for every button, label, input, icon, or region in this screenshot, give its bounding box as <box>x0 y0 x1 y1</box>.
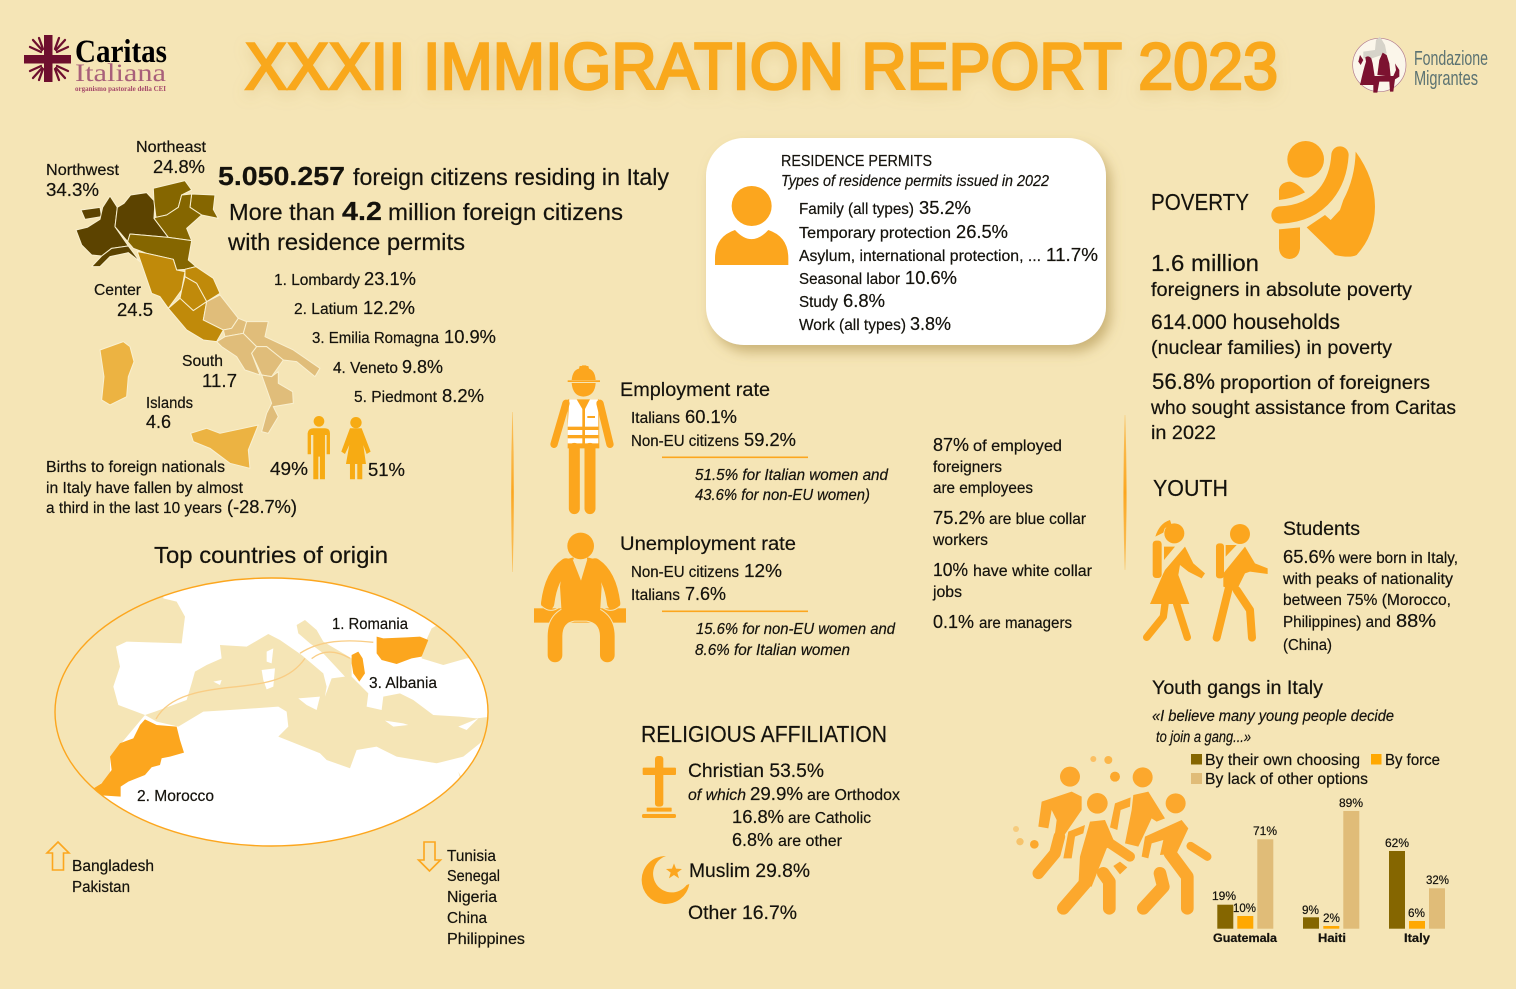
country labels: 1. Romania <box>332 616 408 633</box>
ranking of regions: 9.8% <box>402 357 443 377</box>
heading: YOUTH <box>1153 475 1228 501</box>
icon: pilgrims on donkey <box>1353 37 1406 93</box>
text block: employee statistics: are managers <box>979 615 1072 632</box>
unemployment figures: Italians <box>631 587 680 604</box>
students text: 65.6% <box>1283 547 1335 567</box>
panel: poverty <box>1150 141 1456 444</box>
poverty figures: who sought assistance from Caritas <box>1150 398 1456 419</box>
icon: cross <box>642 756 676 818</box>
text block: employee statistics: workers <box>932 532 988 549</box>
label: Center: Center <box>94 282 141 299</box>
country: Albania <box>352 652 365 682</box>
map of the Mediterranean <box>54 577 489 847</box>
poverty figures: proportion of foreigners <box>1220 373 1430 394</box>
students text: with peaks of nationality <box>1282 571 1453 588</box>
legend: By force <box>1385 752 1440 769</box>
logo: Caritas Italiana: Italiana <box>75 60 166 87</box>
students text: (China) <box>1283 637 1332 654</box>
Christian figures: are Catholic <box>788 810 871 827</box>
label: South: 11.7 <box>202 371 237 391</box>
text block: employee statistics: 10% <box>933 560 968 580</box>
text: births: Births to foreign nationals <box>46 459 225 476</box>
list of permit types: 3.8% <box>910 314 951 334</box>
poverty figures: (nuclear families) in poverty <box>1151 338 1393 359</box>
poverty figures: in 2022 <box>1151 423 1216 444</box>
headline: residence permits: million foreign citizens <box>388 199 623 225</box>
ranking of regions: 23.1% <box>364 269 416 289</box>
students text: 88% <box>1396 611 1436 631</box>
text block: employee statistics: are employees <box>933 480 1033 497</box>
list of permit types: Seasonal labor <box>799 271 900 288</box>
poverty figures: 1.6 million <box>1151 250 1259 276</box>
headline: foreign citizens residing: 5.050.257 <box>218 161 345 191</box>
text block: employee statistics: 75.2% <box>933 508 985 528</box>
group: Italy: Italy <box>1404 933 1431 945</box>
heading: Employment rate <box>620 380 770 401</box>
label: Islands: 4.6 <box>146 412 171 432</box>
headline: residence permits: with residence permits <box>227 229 465 255</box>
note: women employment: 51.5% for Italian women and <box>695 467 889 484</box>
Christian figures: 6.8% <box>732 830 773 850</box>
unemployment figures <box>631 561 782 604</box>
group: Italy: 32% <box>1426 875 1449 887</box>
ranking of regions: 12.2% <box>363 298 415 318</box>
employment figures: Non-EU citizens <box>631 433 739 450</box>
icon: man and woman <box>308 416 371 479</box>
logo: Caritas Italiana: organismo pastorale della CEI <box>75 85 166 93</box>
icon: person <box>715 186 788 265</box>
panel: youth <box>1147 475 1458 654</box>
region: Northeast <box>128 181 218 270</box>
logo: Fondazione Migrantes: Fondazione <box>1414 48 1488 70</box>
text block: employee statistics: foreigners <box>933 459 1002 476</box>
rising countries: Pakistan <box>72 879 130 896</box>
panel: top countries of origin <box>30 542 525 948</box>
employment figures: 59.2% <box>744 430 796 450</box>
falling countries: Senegal <box>447 868 500 885</box>
region: South <box>203 295 320 433</box>
legend: By their own choosing <box>1205 752 1360 769</box>
note: women employment: 43.6% for non-EU women) <box>695 487 870 504</box>
icon: students <box>1147 520 1268 638</box>
unemployment figures: Non-EU citizens <box>631 564 739 581</box>
unemployment figures: 12% <box>744 561 782 581</box>
text block: employee statistics <box>932 435 1092 632</box>
country labels: 2. Morocco <box>137 788 214 805</box>
title: XXXII IMMIGRATION REPORT 2023 <box>245 29 1278 103</box>
label: Northwest: 34.3% <box>46 180 99 200</box>
text: births: (-28.7%) <box>227 497 297 517</box>
list of permit types: Work (all types) <box>799 317 906 334</box>
falling countries: China <box>447 910 487 927</box>
headline: residence permits <box>227 196 623 255</box>
Christian figures <box>688 761 900 850</box>
list of permit types: 11.7% <box>1046 245 1098 265</box>
falling countries <box>447 848 525 948</box>
falling countries: Tunisia <box>447 848 496 865</box>
label: Northeast: 24.8% <box>153 157 205 177</box>
region: Center <box>137 252 223 342</box>
group: Guatemala <box>1212 826 1278 945</box>
region: Islands <box>100 342 258 468</box>
divider left <box>512 412 514 572</box>
headline: residence permits: More than <box>229 199 335 225</box>
ranking of regions: 1. Lombardy <box>274 272 360 289</box>
poverty figures: 614.000 households <box>1151 311 1340 334</box>
list of permit types: 10.6% <box>905 268 957 288</box>
panel: employment <box>554 365 889 509</box>
group: Italy <box>1385 838 1449 945</box>
heading: Types of residence permits issued in 2022 <box>781 173 1049 190</box>
icon: seated man <box>534 533 626 655</box>
Christian figures: are other <box>778 833 842 850</box>
note: women unemployment: 15.6% for non-EU women and <box>696 621 896 638</box>
list of permit types: 26.5% <box>956 222 1008 242</box>
label: Northwest: Northwest <box>46 162 120 179</box>
note: women unemployment <box>695 621 896 659</box>
icon: worker <box>554 365 610 509</box>
employment figures: 60.1% <box>685 407 737 427</box>
text: births: in Italy have fallen by almost <box>46 480 244 497</box>
Muslim figure: Muslim 29.8% <box>689 861 810 882</box>
list of permit types: Temporary protection <box>799 225 951 242</box>
poverty figures <box>1150 250 1456 444</box>
Other figure: Other 16.7% <box>688 903 797 924</box>
stat: gender split: 51% <box>368 460 405 480</box>
list of permit types: Family (all types) <box>799 201 914 218</box>
icon: crescent and star <box>642 856 689 904</box>
country: Romania <box>377 637 428 664</box>
text block: employee statistics: have white collar <box>973 563 1092 580</box>
poverty figures: foreigners in absolute poverty <box>1151 280 1413 301</box>
text: births: a third in the last 10 years <box>46 500 222 517</box>
label: Center <box>94 282 153 320</box>
group: Guatemala: 10% <box>1233 903 1256 915</box>
stat: gender split <box>270 459 405 480</box>
logo: Caritas Italiana <box>24 34 167 93</box>
text block: employee statistics: 87% <box>933 435 969 455</box>
heading: Top countries of origin <box>154 542 388 568</box>
group: Guatemala: Guatemala <box>1213 933 1278 945</box>
logo: Fondazione Migrantes: Migrantes <box>1414 68 1478 90</box>
map of Italy by macro-region <box>76 181 320 468</box>
icon: crouching person <box>1279 141 1375 259</box>
rising countries <box>72 858 154 896</box>
ranking of regions: 10.9% <box>444 327 496 347</box>
label: South: South <box>182 353 223 370</box>
headline: foreign citizens residing: foreign citizens residing in Italy <box>353 164 669 190</box>
icon: running group <box>1013 756 1207 908</box>
label: Center: 24.5 <box>117 300 153 320</box>
list of permit types <box>799 198 1098 334</box>
icon: up arrow <box>47 842 69 870</box>
students text: Students <box>1283 519 1360 540</box>
group: Haiti: 89% <box>1339 798 1363 810</box>
text block: employee statistics: 0.1% <box>933 612 974 632</box>
ranking of regions: 2. Latium <box>294 301 358 318</box>
logo: Caritas Italiana: Caritas <box>75 34 167 70</box>
Christian figures: Christian 53.5% <box>688 761 824 782</box>
quote <box>1152 708 1394 746</box>
group: Italy: 62% <box>1385 838 1409 850</box>
text block: employee statistics: of employed <box>973 438 1062 455</box>
label: Northeast: Northeast <box>136 139 207 156</box>
group: Haiti: 9% <box>1302 905 1319 917</box>
Christian figures: 29.9% <box>750 784 803 804</box>
list of permit types: Study <box>799 294 838 311</box>
students text <box>1282 519 1458 654</box>
rising countries: Bangladesh <box>72 858 154 875</box>
bar chart <box>1212 798 1449 945</box>
country labels <box>137 616 437 805</box>
legend <box>1191 752 1440 788</box>
label: Northeast <box>136 139 207 177</box>
list of permit types: 35.2% <box>919 198 971 218</box>
Christian figures: of which <box>688 787 746 804</box>
icon: Caritas cross <box>24 35 71 82</box>
Christian figures: 16.8% <box>732 807 784 827</box>
quote: to join a gang...» <box>1156 729 1251 746</box>
heading: RELIGIOUS AFFILIATION <box>641 721 887 747</box>
heading <box>781 153 1049 190</box>
Christian figures: are Orthodox <box>807 787 900 804</box>
flow arrows <box>156 641 373 719</box>
heading: Unemployment rate <box>620 534 796 555</box>
employment figures: Italians <box>631 410 680 427</box>
panel: religious affiliation <box>641 721 900 924</box>
label: Islands: Islands <box>146 395 193 412</box>
country labels: 3. Albania <box>369 675 437 692</box>
falling countries: Philippines <box>447 931 525 948</box>
panel: youth gangs <box>1013 678 1449 945</box>
list of permit types: 6.8% <box>843 291 885 311</box>
label: South <box>182 353 237 391</box>
note: women unemployment: 8.6% for Italian women <box>695 642 850 659</box>
headline: residence permits: 4.2 <box>342 196 382 226</box>
group: Haiti: Haiti <box>1318 933 1346 945</box>
ranking of regions <box>274 269 496 406</box>
ranking of regions: 5. Piedmont <box>354 389 438 406</box>
label: Northwest <box>46 162 120 200</box>
text block: employee statistics: jobs <box>932 584 962 601</box>
employment figures <box>631 407 796 450</box>
group: Guatemala: 19% <box>1212 891 1236 903</box>
group: Haiti <box>1302 798 1363 945</box>
quote: «I believe many young people decide <box>1152 708 1394 725</box>
country: Morocco <box>84 719 184 797</box>
headline: foreign citizens residing <box>218 161 669 191</box>
text: births <box>46 459 297 517</box>
group: Guatemala: 71% <box>1253 826 1277 838</box>
ranking of regions: 8.2% <box>442 386 484 406</box>
heading: RESIDENCE PERMITS <box>781 153 932 170</box>
heading: POVERTY <box>1151 189 1249 215</box>
icon: down arrow <box>418 842 440 871</box>
text block: employee statistics: are blue collar <box>989 511 1086 528</box>
panel: residence permits <box>706 138 1106 345</box>
logo: Fondazione Migrantes <box>1353 37 1488 93</box>
falling countries: Nigeria <box>447 889 497 906</box>
poverty figures: 56.8% <box>1152 369 1215 394</box>
divider right <box>1124 415 1126 570</box>
heading: Youth gangs in Italy <box>1152 678 1324 699</box>
list of permit types: Asylum, international protection, ... <box>799 248 1041 265</box>
region: Northwest <box>76 193 168 267</box>
stat: gender split: 49% <box>270 459 308 479</box>
note: women employment <box>695 467 889 504</box>
students text: Philippines) and <box>1283 614 1391 631</box>
label: Islands <box>146 395 193 432</box>
legend: By lack of other options <box>1205 771 1368 788</box>
group: Haiti: 2% <box>1323 913 1340 925</box>
students text: between 75% (Morocco, <box>1283 592 1451 609</box>
ranking of regions: 4. Veneto <box>333 360 398 377</box>
panel: Italy statistics <box>46 139 669 517</box>
unemployment figures: 7.6% <box>685 584 726 604</box>
ranking of regions: 3. Emilia Romagna <box>312 330 439 347</box>
students text: were born in Italy, <box>1338 550 1458 567</box>
panel: unemployment <box>534 533 896 659</box>
group: Italy: 6% <box>1408 908 1425 920</box>
